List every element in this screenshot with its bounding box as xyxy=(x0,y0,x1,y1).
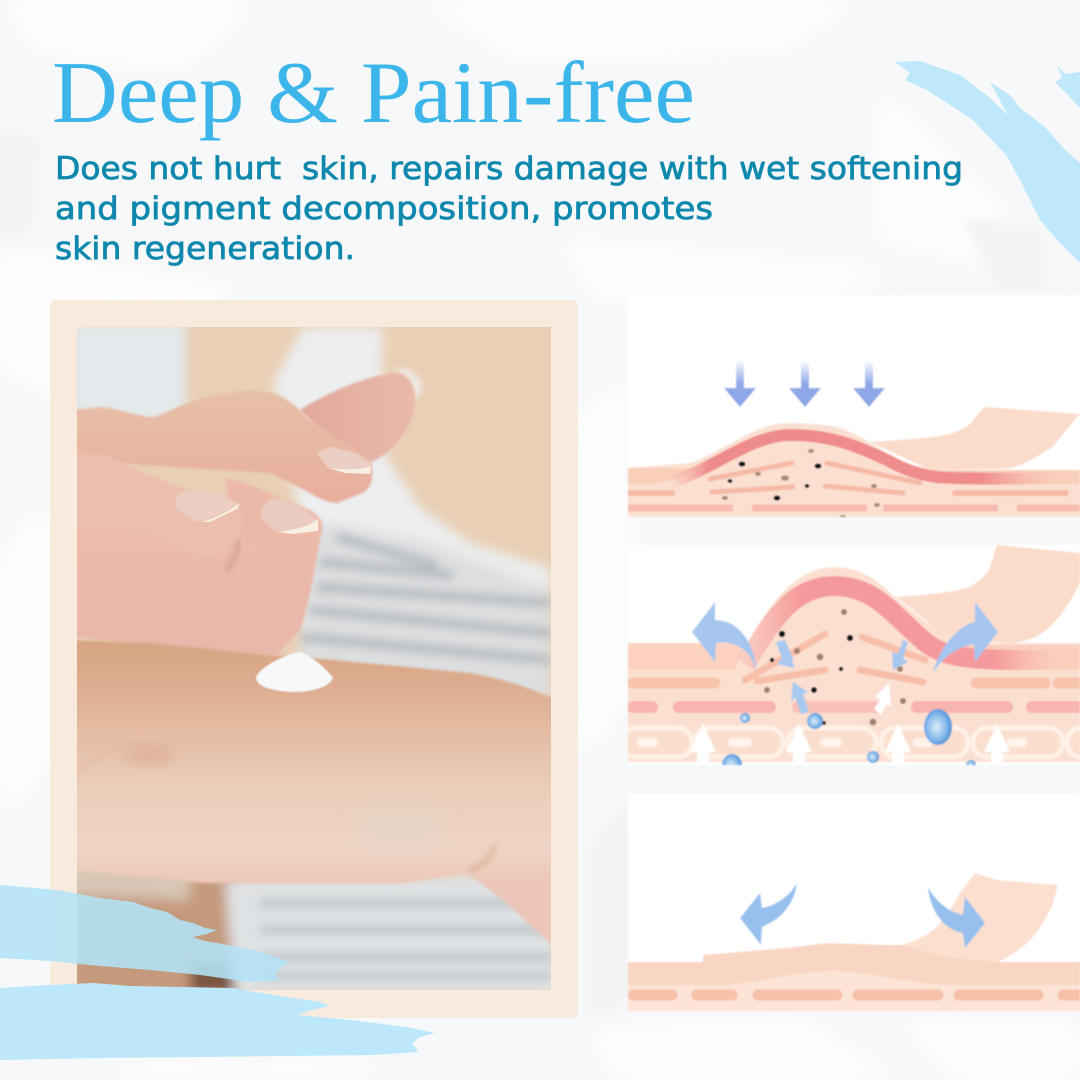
brush stroke: bottom left upper xyxy=(0,885,290,982)
subtitle text block: skin regeneration. xyxy=(55,231,355,267)
subtitle text block: and pigment decomposition, promotes xyxy=(55,191,713,227)
brush stroke: bottom left lower xyxy=(0,983,435,1060)
pigment particles xyxy=(770,631,853,725)
icon: small blue arrows xyxy=(776,640,908,714)
ring nail xyxy=(175,490,240,522)
forearm xyxy=(70,640,555,948)
panel: step 2 absorb diagram xyxy=(620,545,1080,776)
index nail xyxy=(317,447,372,473)
panel: step 3 removal diagram xyxy=(628,794,1080,1011)
pigment particles xyxy=(728,461,822,501)
red band xyxy=(650,435,1080,486)
shirt stripes xyxy=(300,537,551,660)
index finger xyxy=(70,390,372,503)
blue bubbles xyxy=(721,708,977,766)
icon: left curved arrow xyxy=(740,883,797,945)
skin layer xyxy=(628,567,1080,762)
icon: press arrows xyxy=(724,360,885,407)
icon: right curved arrow xyxy=(928,887,985,948)
patch lifted xyxy=(897,545,1080,643)
subtitle text block xyxy=(55,151,963,267)
dermis fibres xyxy=(630,463,1066,493)
patch removed xyxy=(903,873,1058,962)
skin layer xyxy=(628,942,1080,986)
subtitle text block: Does not hurt skin, repairs damage with wet softening xyxy=(55,151,963,187)
panel: photo frame xyxy=(50,300,578,1018)
title: Deep & Pain-free xyxy=(52,45,695,142)
finger shadows xyxy=(226,540,238,572)
cream dollop xyxy=(256,652,333,692)
skin layer xyxy=(628,423,1080,517)
dermis fibres xyxy=(745,634,925,682)
icon: outward curved arrows xyxy=(692,602,998,673)
middle nail xyxy=(260,498,318,533)
red band xyxy=(745,586,1080,664)
photo: cream applied to hand xyxy=(70,320,555,995)
thumb xyxy=(300,367,423,462)
patch peeled xyxy=(870,407,1080,470)
brush stroke: top right xyxy=(895,61,1080,263)
cells row xyxy=(620,728,1080,757)
fibres xyxy=(633,990,1080,1000)
middle finger xyxy=(225,478,324,538)
panel: step 1 press diagram xyxy=(628,295,1080,519)
ring finger xyxy=(77,454,236,523)
white upward arrows xyxy=(690,683,1010,765)
palm xyxy=(70,520,322,655)
